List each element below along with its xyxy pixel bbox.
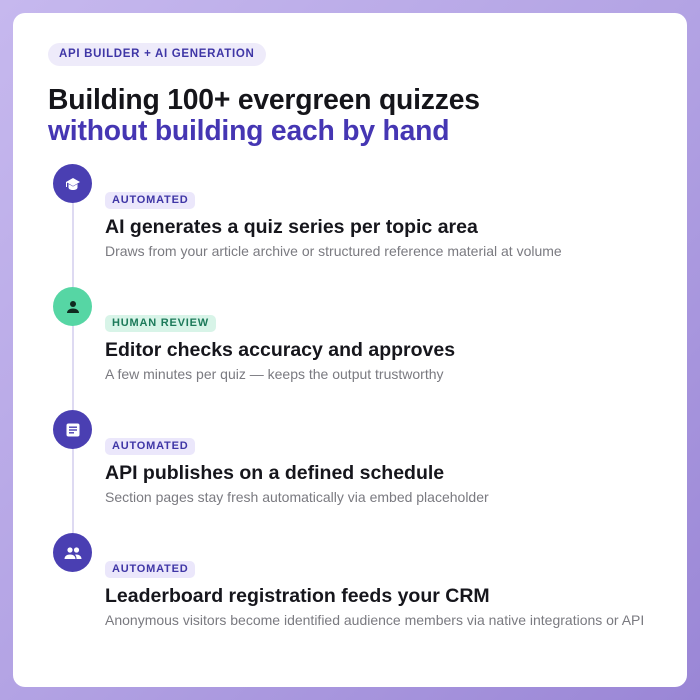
icon: group — [53, 533, 92, 572]
title — [48, 83, 480, 146]
step 2: A few minutes per quiz — keeps the output trustworthy — [105, 366, 444, 382]
title: without building each by hand — [48, 114, 449, 146]
step 2: HUMAN REVIEW — [112, 317, 209, 329]
step 4: AUTOMATED — [112, 563, 188, 575]
step 4: Leaderboard registration feeds your CRM — [105, 585, 490, 607]
tag pill: API BUILDER + AI GENERATION — [59, 48, 255, 60]
step 3: Section pages stay fresh automatically via embed placeholder — [105, 489, 489, 505]
step 4 — [105, 561, 644, 628]
step 1: Draws from your article archive or structured reference material at volume — [105, 243, 562, 259]
step 2: Editor checks accuracy and approves — [105, 339, 455, 361]
step 3 — [105, 438, 489, 505]
step 2 — [105, 315, 455, 382]
tag pill — [48, 43, 266, 66]
title: Building 100+ evergreen quizzes — [48, 83, 480, 115]
icon: graduation cap — [53, 164, 92, 203]
step 3: AUTOMATED — [112, 440, 188, 452]
step 3: API publishes on a defined schedule — [105, 462, 444, 484]
step 1 — [105, 192, 562, 259]
icon: document — [53, 410, 92, 449]
step 1: AI generates a quiz series per topic area — [105, 216, 478, 238]
icon: person — [53, 287, 92, 326]
step 4: Anonymous visitors become identified audience members via native integrations or API — [105, 612, 644, 628]
step 1: AUTOMATED — [112, 194, 188, 206]
